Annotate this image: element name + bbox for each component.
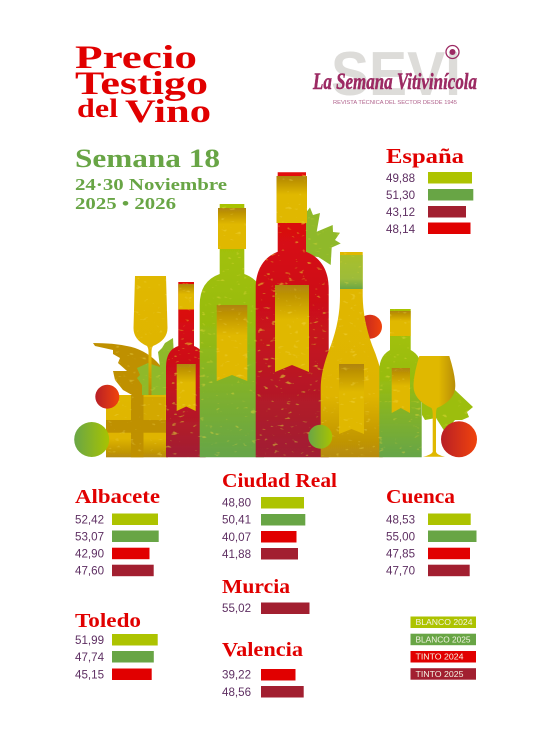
icon: right leaf [422, 380, 473, 432]
panel: Cuenca: Cuenca [386, 486, 455, 508]
panel: Murcia: 55,02 [222, 602, 251, 615]
week heading: Semana 18 [75, 144, 220, 173]
icon: green ball left [74, 422, 109, 457]
title: Testigo [75, 66, 208, 102]
legend: BLANCO 2025 [416, 634, 471, 644]
icon: small green bottle [379, 309, 422, 457]
panel: Albacete: 52,42 [75, 514, 104, 526]
icon: gold box [106, 395, 168, 457]
panel: Toledo: 51,99 [75, 634, 104, 647]
panel: Valencia: 48,56 [222, 686, 251, 699]
panel: Cuenca: 55,00 [386, 530, 415, 544]
icon: red ball behind [358, 315, 382, 339]
panel: Toledo: 45,15 [75, 668, 104, 682]
panel: Valencia [222, 639, 304, 699]
panel: Ciudad Real: 40,07 [222, 531, 251, 544]
panel: Albacete: 42,90 [75, 548, 104, 560]
legend: TINTO 2025 [416, 669, 464, 679]
legend [410, 616, 476, 680]
panel: Toledo [75, 610, 158, 682]
panel: Cuenca: 48,53 [386, 514, 415, 526]
icon: wine glass [414, 356, 455, 457]
icon: dark gold leaf [93, 343, 165, 395]
icon: green leaf left [137, 338, 176, 395]
panel: España: 43,12 [386, 206, 415, 219]
week heading: 24·30 Noviembre [75, 175, 228, 194]
panel: Cuenca [386, 486, 476, 578]
panel: España: España [386, 144, 465, 168]
panel: Ciudad Real: 41,88 [222, 548, 251, 561]
panel: Ciudad Real: 50,41 [222, 514, 251, 526]
panel: Albacete: 53,07 [75, 530, 104, 544]
title [75, 40, 211, 130]
title: del [77, 94, 118, 123]
panel: España [386, 144, 473, 236]
illustration: wine bottles and glasses [74, 172, 477, 457]
icon: big red bottle [256, 172, 329, 457]
panel: Cuenca: 47,70 [386, 564, 415, 578]
logo: La Semana Vitivinícola: REVISTA TÉCNICA DEL SECTOR DESDE 1945 [333, 99, 457, 106]
panel: Toledo: Toledo [75, 610, 141, 632]
icon: small green ball [308, 425, 332, 449]
icon: red ball left [95, 385, 119, 409]
panel: Ciudad Real: 48,80 [222, 496, 251, 510]
icon: small red bottle [166, 282, 206, 457]
icon: white wine bottle [321, 252, 383, 457]
title: Precio [75, 40, 197, 76]
panel: Murcia: Murcia [222, 576, 290, 598]
panel: Ciudad Real: Ciudad Real [222, 470, 337, 492]
week heading: 2025 • 2026 [75, 194, 176, 213]
panel: Albacete: Albacete [75, 486, 160, 508]
logo: La Semana Vitivinícola: SEVI [331, 40, 461, 109]
panel: Toledo: 47,74 [75, 651, 105, 664]
icon: tomato right [441, 421, 477, 457]
logo: La Semana Vitivinícola: La Semana Vitivinícola [312, 69, 477, 94]
panel: Ciudad Real [222, 470, 337, 561]
title: Vino [125, 94, 211, 130]
panel: Murcia [222, 576, 310, 615]
icon: flute glass [134, 276, 168, 395]
panel: España: 49,88 [386, 172, 415, 185]
panel: Albacete [75, 486, 160, 578]
legend: TINTO 2024 [416, 652, 464, 662]
panel: España: 51,30 [386, 189, 415, 202]
panel: Albacete: 47,60 [75, 564, 104, 578]
panel: Cuenca: 47,85 [386, 548, 415, 560]
week heading [75, 144, 228, 213]
icon: big green bottle [200, 204, 264, 457]
legend: BLANCO 2024 [416, 617, 473, 627]
panel: España: 48,14 [386, 223, 416, 236]
panel: Valencia: Valencia [222, 639, 303, 661]
icon: top right leaf [300, 208, 341, 265]
panel: Valencia: 39,22 [222, 668, 251, 682]
